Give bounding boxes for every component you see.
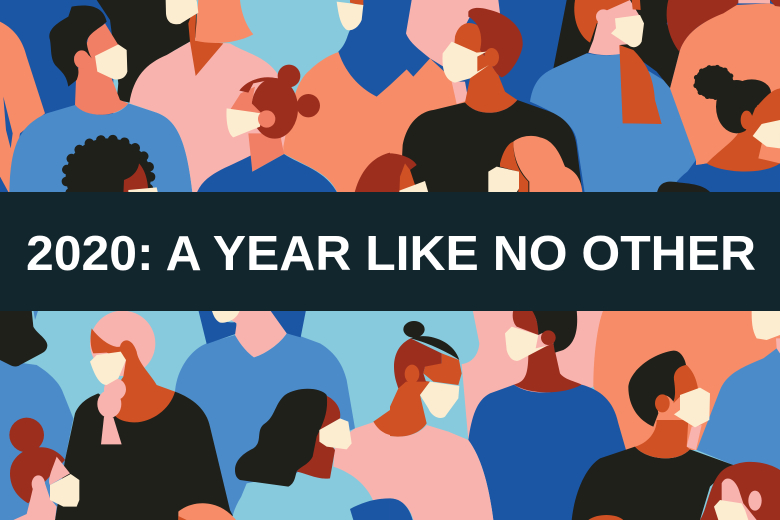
person: man in blue v-neck: [175, 310, 355, 520]
banner: [0, 192, 780, 311]
person: man in black shirt: [572, 351, 733, 520]
person: woman with wavy hair: [232, 389, 390, 520]
person: woman with pink braid: [55, 311, 235, 520]
person: curly hair head: [62, 134, 158, 192]
person: woman with long hair in blue: [530, 0, 696, 195]
title: 2020: A YEAR LIKE NO OTHER: [26, 227, 756, 281]
person: woman in blue with hair bun: [657, 0, 780, 195]
person: girl with bun: [9, 418, 79, 520]
person: man in black shirt: [400, 8, 583, 195]
illustration: crowd top right: [390, 0, 780, 195]
person: man in blue sweater: [9, 5, 193, 195]
person: small head bottom left: [390, 153, 429, 195]
illustration: crowd bottom left: [0, 310, 390, 520]
person: girl with two buns: [196, 65, 338, 195]
person: woman in headscarf: [283, 0, 390, 195]
person: front head with orange hair: [488, 136, 583, 195]
person: woman in pink top with hair bun: [390, 321, 493, 520]
illustration: crowd bottom right: [390, 310, 780, 520]
person: woman in pink: [129, 0, 297, 195]
person: front head orange: [178, 503, 236, 520]
person: man in blue sweater: [468, 310, 626, 520]
illustration: crowd top left: [0, 0, 390, 192]
person: woman with red hair: [700, 462, 780, 520]
